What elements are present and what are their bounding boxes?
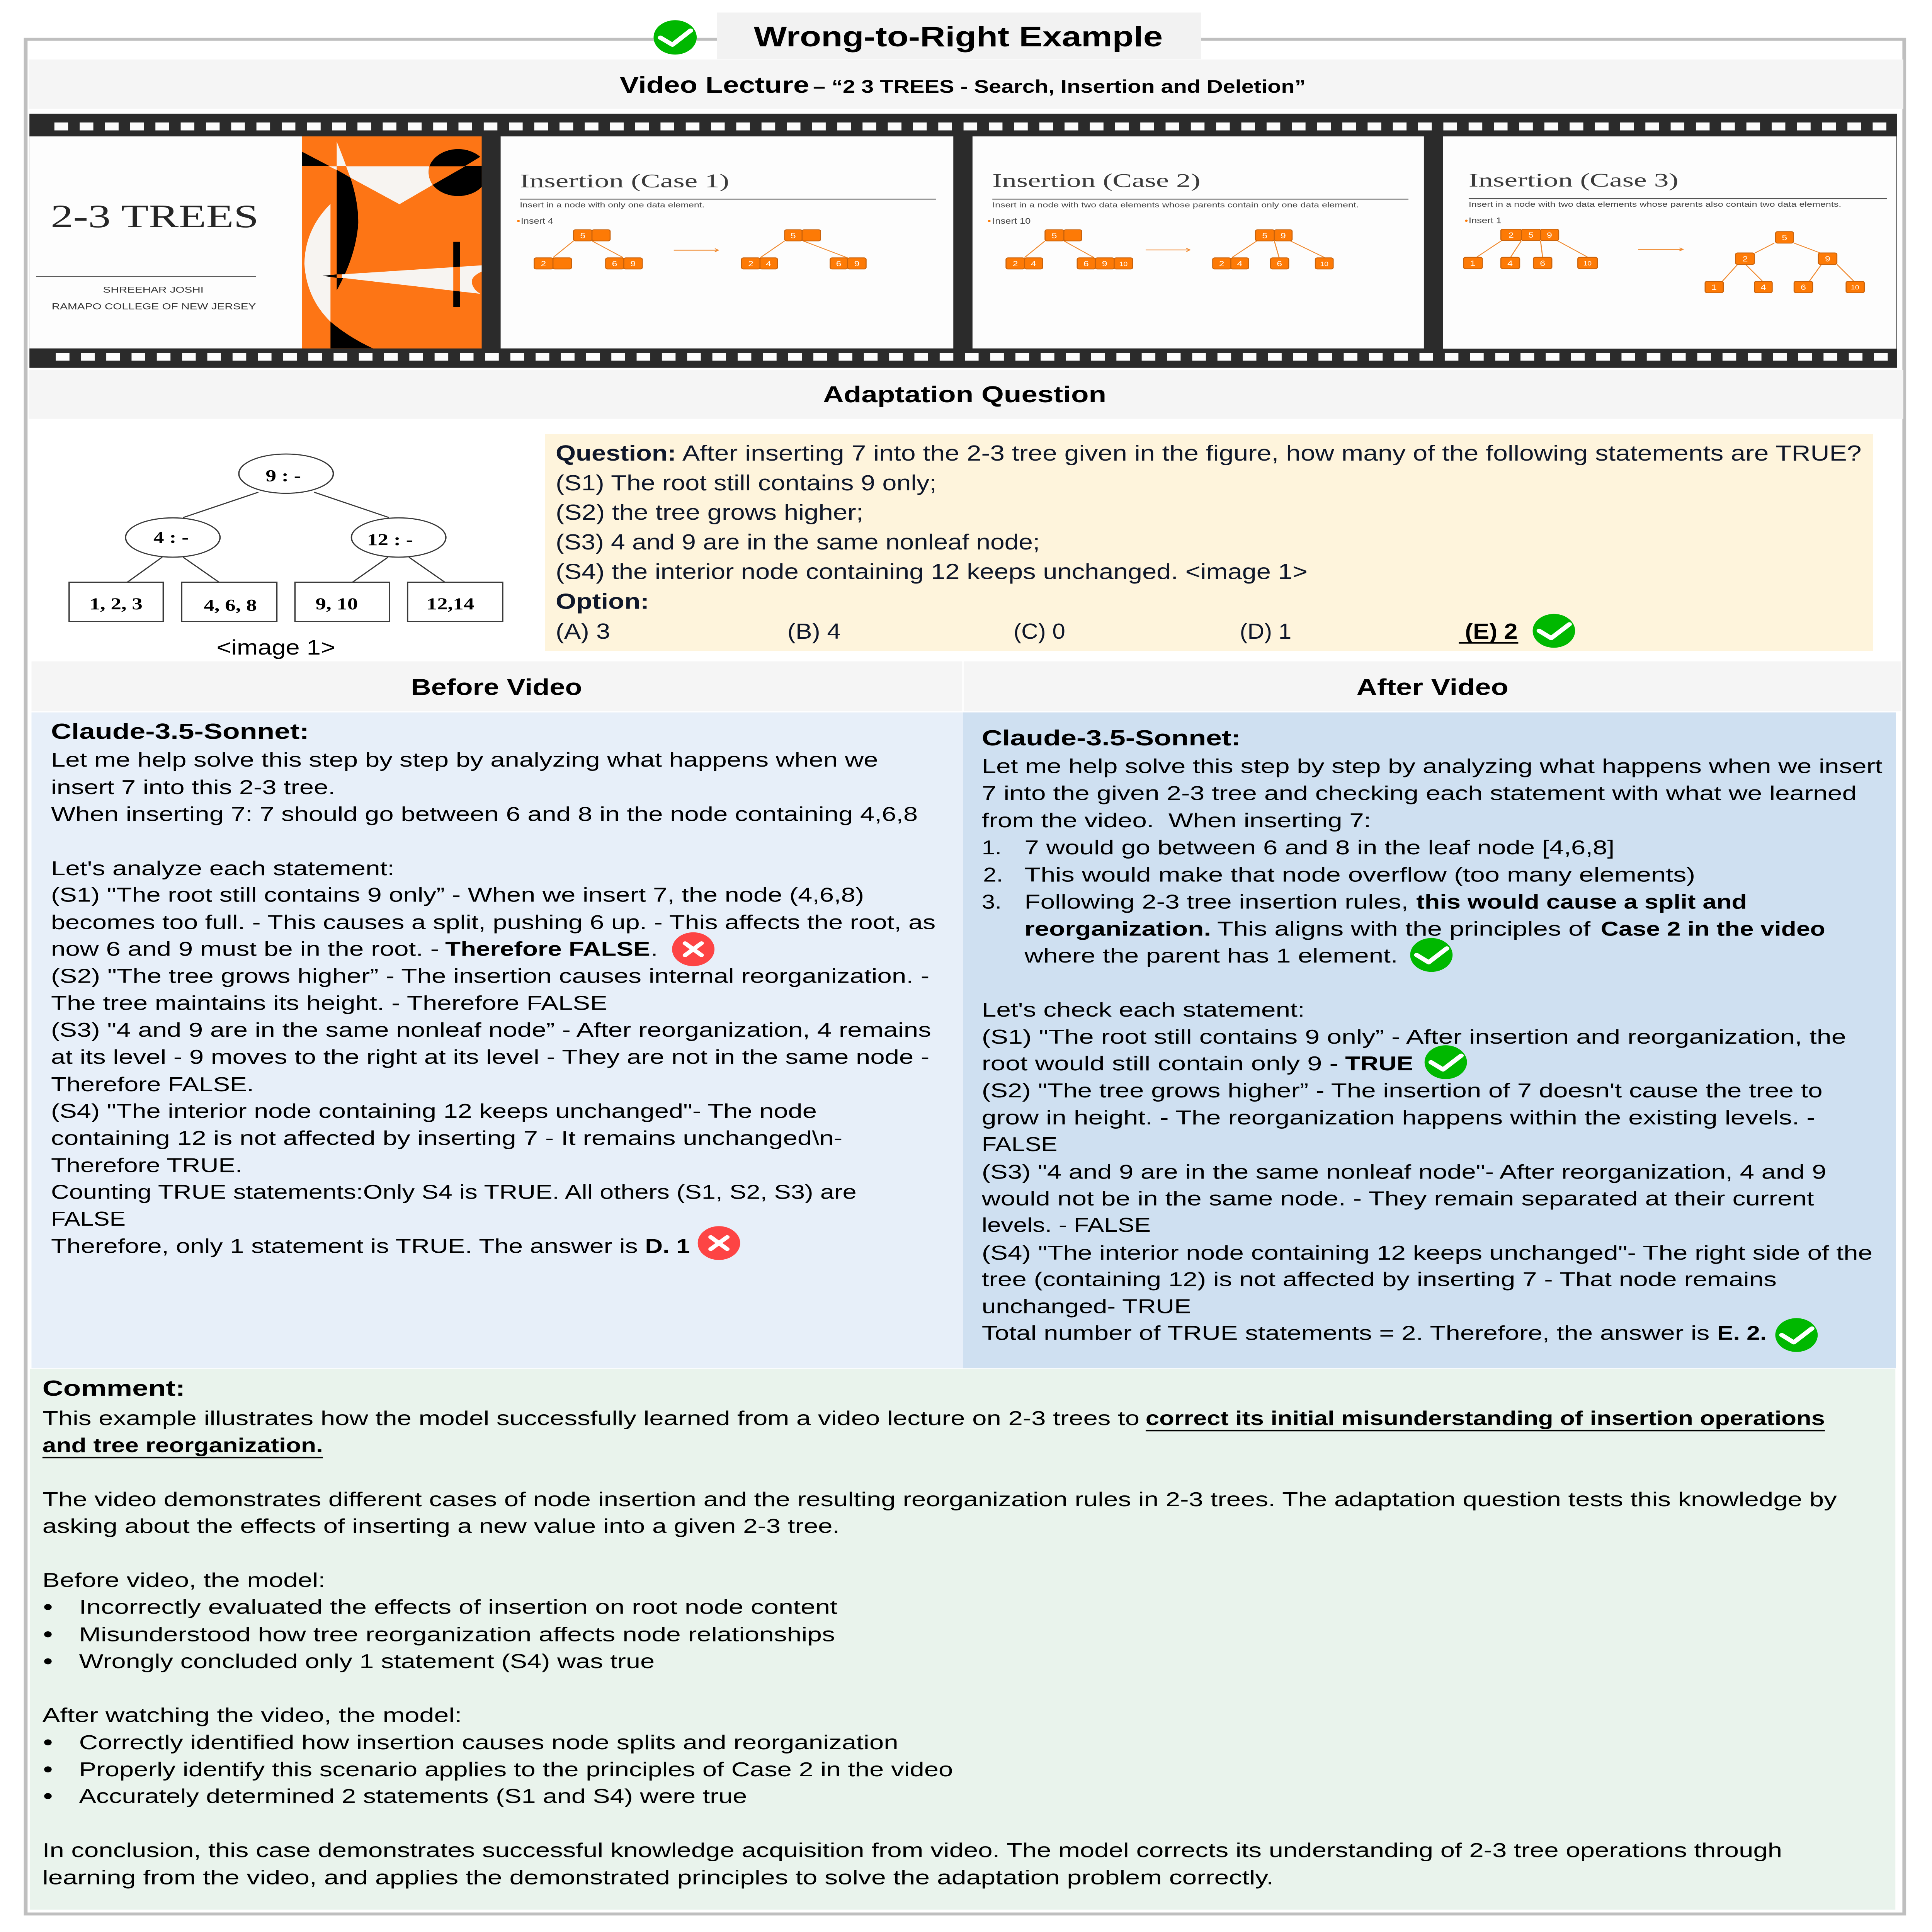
panel: before video answer [31, 713, 963, 1368]
panel: before video answer: Therefore TRUE. [51, 1155, 242, 1177]
heading: before video [31, 662, 962, 711]
bullet list: before video [44, 1596, 837, 1673]
panel: comment: After watching the video, the model: [43, 1704, 462, 1726]
panel: after video answer [963, 713, 1896, 1368]
tree after insertion, case 3 [1705, 231, 1864, 293]
panel: before video answer: (S2) "The tree grows higher” - The insertion causes internal reorganization. - [51, 965, 929, 987]
panel: after video answer: This would make that node overflow (too many elements) [1024, 864, 1695, 886]
panel: comment: learning from the video, and applies the demonstrated principles to solve the adaptation problem correctly. [43, 1867, 1274, 1889]
heading: after video: After Video [1356, 675, 1509, 700]
frame: insertion case 2 [973, 136, 1424, 349]
panel: after video answer: 7 into the given 2-3 tree and checking each statement with what we learned [982, 782, 1857, 804]
tree after insertion, case 3: 9 [1825, 255, 1830, 263]
panel: question: Option: [556, 589, 649, 614]
frame: title slide: SHREEHAR JOSHI [103, 285, 204, 295]
arrow [1638, 248, 1683, 251]
figure: 2-3 tree image: 4, 6, 8 [204, 595, 257, 614]
panel: comment: Before video, the model: [43, 1569, 325, 1591]
icon: correct option check [1533, 614, 1575, 648]
panel: after video answer: E. 2. [1717, 1322, 1767, 1344]
panel: after video answer: grow in height. - The reorganization happens within the existing levels. - [982, 1107, 1815, 1129]
panel: after video answer: 3. [982, 891, 1002, 913]
tree after insertion, case 2: 5 [1262, 231, 1267, 240]
bullet list: after video: Accurately determined 2 statements (S1 and S4) were true [79, 1785, 747, 1807]
tree after insertion, case 1: 6 [836, 260, 841, 268]
frame: insertion case 2: Insert in a node with two data elements whose parents contain only one data element. [992, 201, 1359, 209]
panel: after video answer: FALSE [982, 1133, 1057, 1156]
heading: video lecture: Video Lecture [620, 72, 809, 98]
panel: question: (A) 3 [556, 619, 610, 643]
film strip [29, 114, 1897, 368]
panel: question [545, 434, 1873, 651]
tree after insertion, case 2: 10 [1320, 260, 1328, 267]
frame: title slide: 2-3 TREES [51, 198, 259, 235]
tree before insertion, case 3: 6 [1540, 259, 1545, 267]
icon: check mark, case 2 [1410, 938, 1452, 972]
tree after insertion, case 2: 2 [1219, 260, 1224, 268]
tree before insertion, case 1: 2 [541, 260, 546, 268]
tree after insertion, case 3: 10 [1851, 284, 1859, 291]
bullet list: before video: Misunderstood how tree reorganization affects node relationships [79, 1623, 835, 1646]
panel: after video answer: This aligns with the principles of [1217, 918, 1591, 940]
frame: insertion case 3: Insertion (Case 3) [1469, 169, 1679, 191]
panel: comment: correct its initial misunderstanding of insertion operations [1146, 1407, 1825, 1429]
icon: title check mark [653, 20, 697, 54]
panel: before video answer: Let's analyze each statement: [51, 857, 395, 880]
tree before insertion, case 2: 9 [1102, 260, 1107, 268]
panel: question: (S1) The root still contains 9 only; [556, 471, 937, 495]
tree before insertion, case 1: 5 [580, 231, 585, 240]
panel: comment: asking about the effects of inserting a new value into a given 2-3 tree. [43, 1515, 840, 1537]
panel: after video answer: from the video. When inserting 7: [982, 810, 1371, 832]
tree after insertion, case 1 [742, 230, 866, 269]
heading: after video [964, 662, 1901, 711]
panel: after video answer: Total number of TRUE statements = 2. Therefore, the answer is [982, 1322, 1709, 1344]
panel: after video answer: where the parent has 1 element. [1024, 945, 1398, 967]
panel: before video answer: containing 12 is not affected by inserting 7 - It remains unchanged\n- [51, 1127, 842, 1149]
title [717, 12, 1201, 59]
panel: after video answer: TRUE [1345, 1053, 1413, 1075]
panel: after video answer: Following 2-3 tree insertion rules, [1024, 891, 1408, 913]
tree before insertion, case 2: 6 [1083, 260, 1089, 268]
icon: correct answer check [1775, 1318, 1818, 1352]
tree after insertion, case 1: 9 [854, 260, 859, 268]
panel: question: (E) 2 [1465, 619, 1518, 643]
figure: 2-3 tree image: 12 : - [367, 530, 413, 549]
figure: 2-3 tree image: 9 : - [266, 466, 301, 485]
panel: before video answer: becomes too full. - This causes a split, pushing 6 up. - This affects the root, as [51, 911, 935, 934]
frame: insertion case 1: Insert 4 [521, 216, 553, 226]
icon: check mark, S1 [1425, 1045, 1467, 1079]
panel: question: (S4) the interior node containing 12 keeps unchanged. <image 1> [556, 559, 1308, 584]
tree before insertion, case 2: 10 [1119, 260, 1128, 267]
panel: comment: and tree reorganization. [43, 1434, 323, 1456]
tree before insertion, case 1: 6 [612, 260, 617, 268]
panel: comment: In conclusion, this case demonstrates successful knowledge acquisition from video. The model corrects its understanding of 2-3 tree operations through [43, 1839, 1782, 1861]
heading: adaptation question: Adaptation Question [823, 382, 1106, 407]
panel: comment: This example illustrates how the model successfully learned from a video lecture on 2-3 trees to [43, 1407, 1139, 1429]
tree before insertion, case 3 [1464, 229, 1597, 269]
panel: before video answer: Let me help solve this step by step by analyzing what happens when we [51, 749, 878, 771]
tree after insertion, case 3: 2 [1743, 255, 1748, 263]
panel: before video answer: D. 1 [645, 1235, 690, 1257]
figure: 2-3 tree image: 12,14 [427, 594, 474, 613]
arrow [674, 248, 718, 252]
panel: after video answer: (S1) "The root still contains 9 only” - After insertion and reorganization, the [982, 1026, 1846, 1048]
bullet list: after video: Correctly identified how insertion causes node splits and reorganization [79, 1731, 898, 1753]
panel: question: Question: [556, 441, 676, 465]
tree after insertion, case 1: 5 [791, 231, 796, 240]
title: Wrong-to-Right Example [754, 21, 1163, 53]
tree before insertion, case 2 [1006, 230, 1133, 269]
panel: question: (S2) the tree grows higher; [556, 500, 863, 524]
tree before insertion, case 3: 2 [1509, 231, 1514, 239]
tree after insertion, case 1: 2 [748, 260, 753, 268]
heading: video lecture [29, 60, 1903, 109]
arrow [1146, 248, 1190, 252]
tree before insertion, case 1 [534, 230, 642, 269]
panel: before video answer: . [651, 938, 658, 960]
tree before insertion, case 2: 2 [1013, 260, 1018, 268]
panel: after video answer: this would cause a split and [1416, 891, 1747, 913]
panel: question: (B) 4 [787, 619, 841, 643]
panel: after video answer: (S4) "The interior node containing 12 keeps unchanged"- The right side of the [982, 1242, 1872, 1264]
panel: before video answer: Therefore FALSE. [51, 1073, 254, 1095]
tree after insertion, case 3: 1 [1711, 283, 1717, 291]
panel: before video answer: (S1) "The root still contains 9 only” - When we insert 7, the node (4,6,8) [51, 884, 864, 906]
panel: before video answer: Therefore FALSE [445, 938, 650, 960]
tree before insertion, case 3: 9 [1547, 231, 1552, 239]
panel: before video answer: (S3) "4 and 9 are in the same nonleaf node” - After reorganization, 4 remains [51, 1019, 931, 1041]
tree before insertion, case 3: 1 [1470, 259, 1475, 267]
bullet list: after video: Properly identify this scenario applies to the principles of Case 2 in the video [79, 1759, 953, 1781]
tree before insertion, case 2: 4 [1031, 260, 1036, 268]
panel: before video answer: (S4) "The interior node containing 12 keeps unchanged"- The node [51, 1100, 817, 1122]
tree after insertion, case 3: 5 [1782, 233, 1787, 242]
frame: insertion case 3: Insert 1 [1469, 216, 1502, 225]
panel: before video answer: FALSE [51, 1208, 126, 1230]
panel: before video answer: The tree maintains its height. - Therefore FALSE [51, 992, 607, 1014]
caption: image 1: <image 1> [217, 636, 335, 659]
tree before insertion, case 3: 5 [1528, 231, 1534, 239]
heading: before video: Before Video [411, 675, 582, 700]
frame: insertion case 1: Insertion (Case 1) [520, 170, 729, 192]
panel: question: (C) 0 [1014, 619, 1065, 643]
panel: comment [30, 1369, 1895, 1910]
frame: insertion case 2: Insertion (Case 2) [992, 170, 1201, 191]
tree after insertion, case 2: 9 [1281, 231, 1286, 240]
heading: adaptation question [29, 370, 1903, 419]
tree after insertion, case 1: 4 [766, 260, 771, 268]
panel: before video answer: When inserting 7: 7 should go between 6 and 8 in the node containing 4,6,8 [51, 803, 918, 825]
bullet list: after video [44, 1731, 953, 1807]
panel: after video answer: levels. - FALSE [982, 1214, 1151, 1236]
panel: after video answer: 2. [983, 864, 1003, 886]
frame: insertion case 2: Insert 10 [992, 216, 1031, 226]
tree after insertion, case 3: 6 [1801, 283, 1806, 291]
panel: after video answer: tree (containing 12) is not affected by inserting 7 - That node remains [982, 1269, 1777, 1291]
tree before insertion, case 1: 9 [630, 260, 636, 268]
frame: insertion case 3: Insert in a node with two data elements whose parents also contain two data elements. [1469, 201, 1841, 209]
tree after insertion, case 2 [1213, 230, 1333, 269]
panel: after video answer: root would still contain only 9 - [982, 1053, 1338, 1075]
figure: 2-3 tree image: 1, 2, 3 [90, 594, 143, 613]
bullet list: before video: Incorrectly evaluated the effects of insertion on root node content [79, 1596, 837, 1618]
panel: after video answer: Claude-3.5-Sonnet: [982, 726, 1241, 750]
tree after insertion, case 2: 6 [1277, 260, 1282, 268]
frame: insertion case 3 [1443, 136, 1896, 349]
panel: before video answer: Claude-3.5-Sonnet: [51, 719, 309, 744]
slide artwork [302, 136, 488, 349]
frame: insertion case 1: Insert in a node with only one data element. [520, 201, 704, 209]
frame: title slide: RAMAPO COLLEGE OF NEW JERSEY [52, 302, 256, 311]
figure: 2-3 tree image: 4 : - [153, 528, 189, 547]
panel: after video answer: (S2) "The tree grows higher” - The insertion of 7 doesn't cause the tree to [982, 1080, 1823, 1102]
panel: comment: Comment: [43, 1376, 185, 1400]
panel: after video answer: would not be in the same node. - They remain separated at their current [981, 1188, 1814, 1210]
panel: after video answer: Let me help solve this step by step by analyzing what happens when we insert [982, 755, 1883, 777]
panel: question: (S3) 4 and 9 are in the same nonleaf node; [556, 530, 1040, 554]
bullet list: before video: Wrongly concluded only 1 statement (S4) was true [79, 1650, 655, 1673]
panel: after video answer: Let's check each statement: [982, 999, 1305, 1021]
panel: after video answer: 7 would go between 6 and 8 in the leaf node [4,6,8] [1024, 837, 1614, 859]
figure: 2-3 tree image: 9, 10 [316, 594, 358, 613]
icon: wrong answer mark [698, 1226, 740, 1260]
panel: after video answer: Case 2 in the video [1601, 918, 1825, 940]
panel: after video answer: reorganization. [1024, 918, 1211, 940]
tree after insertion, case 3: 4 [1761, 283, 1766, 291]
panel: before video answer: insert 7 into this 2-3 tree. [51, 776, 335, 798]
panel: question: After inserting 7 into the 2-3 tree given in the figure, how many of the following statements are TRUE? [682, 441, 1862, 465]
frame: title slide [29, 136, 488, 349]
panel: comment: The video demonstrates different cases of node insertion and the resulting reorganization rules in 2-3 trees. The adaptation question tests this knowledge by [43, 1488, 1837, 1510]
panel: before video answer: Counting TRUE statements:Only S4 is TRUE. All others (S1, S2, S3) are [51, 1181, 857, 1203]
panel: before video answer: at its level - 9 moves to the right at its level - They are not in the same node - [51, 1046, 929, 1068]
figure: 2-3 tree image [69, 454, 503, 622]
tree before insertion, case 2: 5 [1052, 231, 1057, 240]
tree before insertion, case 3: 10 [1583, 260, 1592, 267]
panel: after video answer: unchanged- TRUE [982, 1296, 1191, 1318]
panel: after video answer: 1. [982, 837, 1002, 859]
icon: wrong mark [672, 932, 714, 966]
tree before insertion, case 3: 4 [1507, 259, 1513, 267]
panel: before video answer: now 6 and 9 must be in the root. - [51, 938, 439, 960]
panel: after video answer: (S3) "4 and 9 are in the same nonleaf node"- After reorganization, 4 and 9 [982, 1161, 1826, 1183]
panel: before video answer: Therefore, only 1 statement is TRUE. The answer is [51, 1235, 638, 1257]
panel: question: (D) 1 [1240, 619, 1291, 643]
heading: video lecture: – “2 3 TREES - Search, Insertion and Deletion” [813, 77, 1306, 97]
tree after insertion, case 2: 4 [1237, 260, 1242, 268]
frame: insertion case 1 [501, 136, 953, 349]
